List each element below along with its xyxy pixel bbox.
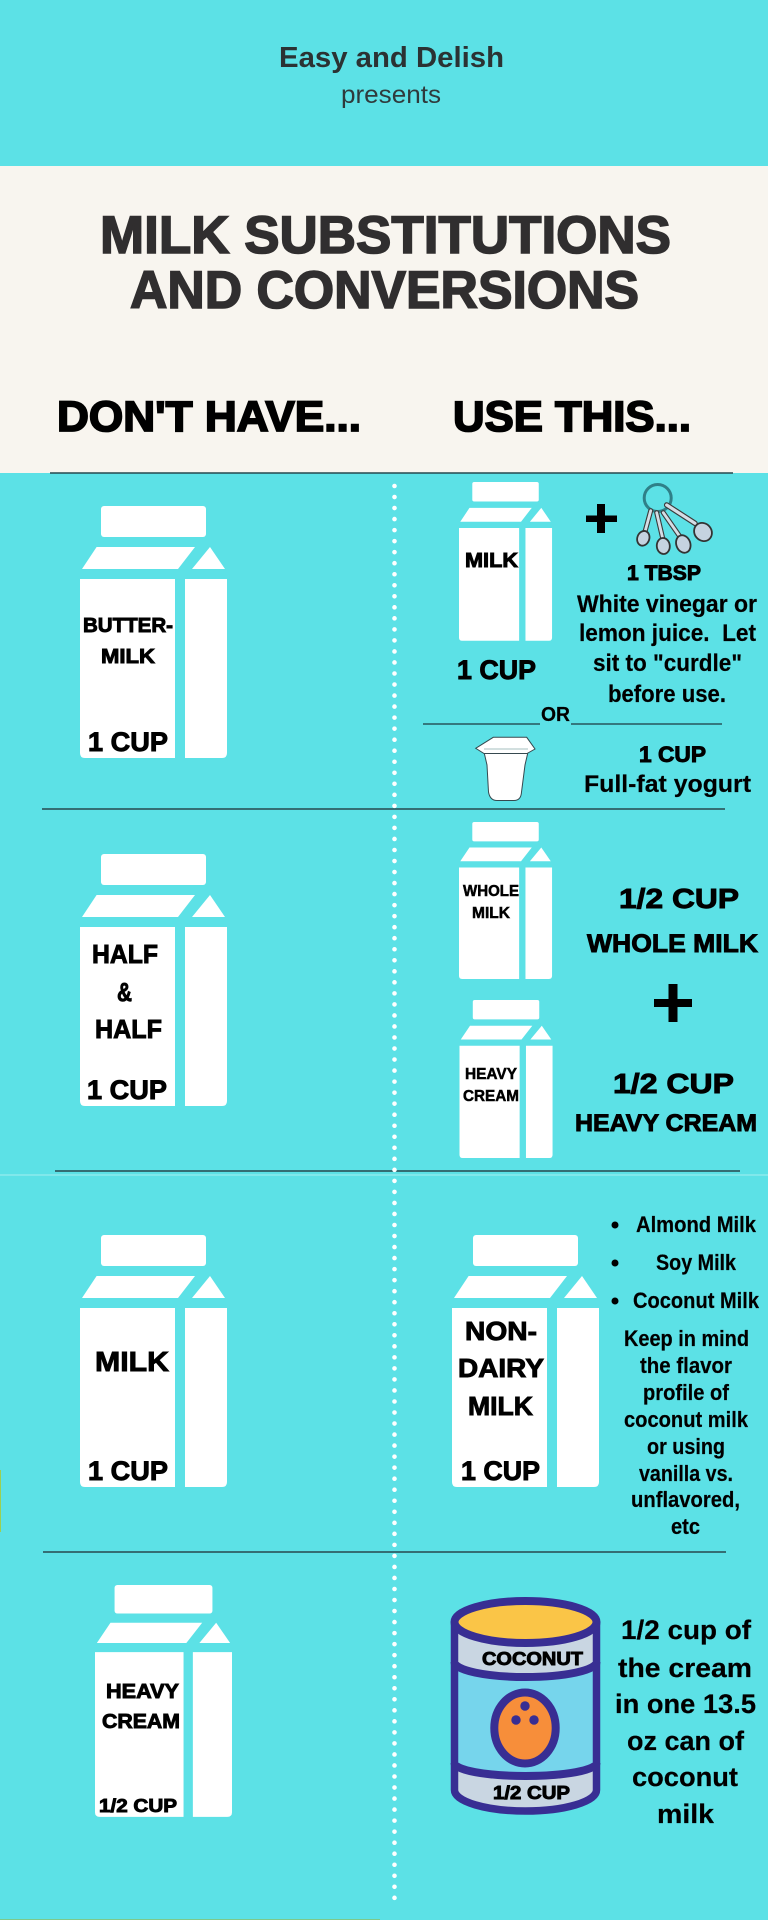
panel: heavy cream <box>95 1585 756 1829</box>
title: AND CONVERSIONS <box>130 261 639 320</box>
flavor note: unflavored, <box>631 1487 740 1512</box>
carton: heavy cream: CREAM <box>102 1711 180 1733</box>
carton: half and half: 1 CUP <box>87 1075 167 1105</box>
carton: non-dairy milk: MILK <box>468 1391 533 1421</box>
plus sign <box>586 504 617 533</box>
coconut cream text: coconut <box>632 1762 738 1792</box>
carton: half and half: HALF <box>95 1014 162 1044</box>
whole milk amount <box>587 883 758 958</box>
carton: non-dairy milk: DAIRY <box>458 1353 544 1383</box>
vinegar instructions: lemon juice. Let <box>579 620 756 647</box>
yogurt text <box>584 742 751 798</box>
presents line: presents <box>341 81 441 109</box>
whole milk amount: WHOLE MILK <box>587 930 758 958</box>
flavor note: etc <box>671 1514 700 1539</box>
coconut cream text: oz can of <box>627 1726 745 1756</box>
carton: heavy cream <box>95 1585 232 1817</box>
heavy cream amount: HEAVY CREAM <box>575 1110 757 1137</box>
carton: half and half: & <box>117 977 132 1007</box>
carton: buttermilk: 1 CUP <box>88 727 168 757</box>
carton: non-dairy milk: NON- <box>465 1316 537 1346</box>
flavor note <box>624 1326 749 1539</box>
title panel <box>0 166 768 473</box>
header band <box>279 42 504 109</box>
yogurt text: 1 CUP <box>639 742 706 767</box>
coconut cream text: 1/2 cup of <box>621 1615 752 1645</box>
milk quantity: 1 CUP <box>457 655 536 685</box>
flavor note: or using <box>647 1434 725 1459</box>
carton: whole milk: WHOLE <box>463 883 519 900</box>
carton: buttermilk: MILK <box>101 646 156 668</box>
carton: buttermilk: BUTTER- <box>83 615 173 637</box>
flavor note: profile of <box>643 1380 730 1405</box>
dotted column divider <box>392 486 397 1899</box>
carton: heavy cream: CREAM <box>463 1088 519 1105</box>
carton: milk <box>459 482 552 641</box>
title: MILK SUBSTITUTIONS <box>100 206 671 265</box>
vinegar instructions: sit to "curdle" <box>593 650 742 677</box>
or divider: OR <box>541 704 571 726</box>
coconut cream text: milk <box>657 1799 715 1829</box>
icon: coconut milk can: 1/2 CUP <box>493 1783 570 1803</box>
vinegar instructions: 1 TBSP <box>627 562 701 585</box>
carton: milk <box>80 1235 227 1487</box>
non-dairy milk list <box>612 1212 760 1313</box>
carton: half and half: HALF <box>92 939 158 969</box>
icon: coconut milk can <box>454 1601 596 1811</box>
carton: heavy cream: HEAVY <box>465 1066 518 1083</box>
carton: whole milk: MILK <box>472 905 511 922</box>
coconut cream text <box>615 1615 756 1829</box>
non-dairy milk list: Soy Milk <box>656 1250 737 1275</box>
flavor note: vanilla vs. <box>639 1461 733 1486</box>
carton: whole milk <box>459 822 552 979</box>
heavy cream amount <box>575 1068 757 1137</box>
carton: milk: MILK <box>95 1346 169 1377</box>
brand name: Easy and Delish <box>279 42 504 74</box>
carton: milk: 1 CUP <box>88 1456 168 1486</box>
icon: measuring spoons <box>635 484 716 555</box>
vinegar instructions: White vinegar or <box>577 591 757 618</box>
carton: heavy cream: HEAVY <box>106 1681 180 1703</box>
vinegar instructions: before use. <box>608 681 726 708</box>
carton: non-dairy milk <box>452 1235 599 1487</box>
carton: half and half <box>80 854 227 1106</box>
coconut cream text: in one 13.5 <box>615 1689 756 1719</box>
carton: buttermilk <box>80 506 227 758</box>
column heading: don't have: DON'T HAVE... <box>57 393 361 441</box>
column heading: use this: USE THIS... <box>453 393 691 441</box>
yogurt text: Full-fat yogurt <box>584 771 751 798</box>
carton: heavy cream: 1/2 CUP <box>99 1796 177 1816</box>
title <box>100 206 671 320</box>
carton: milk: MILK <box>465 550 519 572</box>
heavy cream amount: 1/2 CUP <box>613 1068 734 1099</box>
plus sign <box>654 984 692 1022</box>
icon: coconut milk can: COCONUT <box>482 1649 583 1669</box>
flavor note: Keep in mind <box>624 1326 749 1351</box>
carton: heavy cream <box>460 1000 553 1158</box>
carton: non-dairy milk: 1 CUP <box>461 1456 540 1486</box>
icon: yogurt cup <box>476 737 535 800</box>
panel: buttermilk <box>80 482 757 800</box>
whole milk amount: 1/2 CUP <box>619 883 739 914</box>
flavor note: coconut milk <box>624 1407 749 1432</box>
panel: milk <box>80 1212 760 1539</box>
panel: half and half <box>80 822 758 1158</box>
flavor note: the flavor <box>640 1353 732 1378</box>
vinegar instructions <box>577 562 757 708</box>
non-dairy milk list: Almond Milk <box>636 1212 757 1237</box>
coconut cream text: the cream <box>618 1653 752 1683</box>
non-dairy milk list: Coconut Milk <box>633 1288 760 1313</box>
